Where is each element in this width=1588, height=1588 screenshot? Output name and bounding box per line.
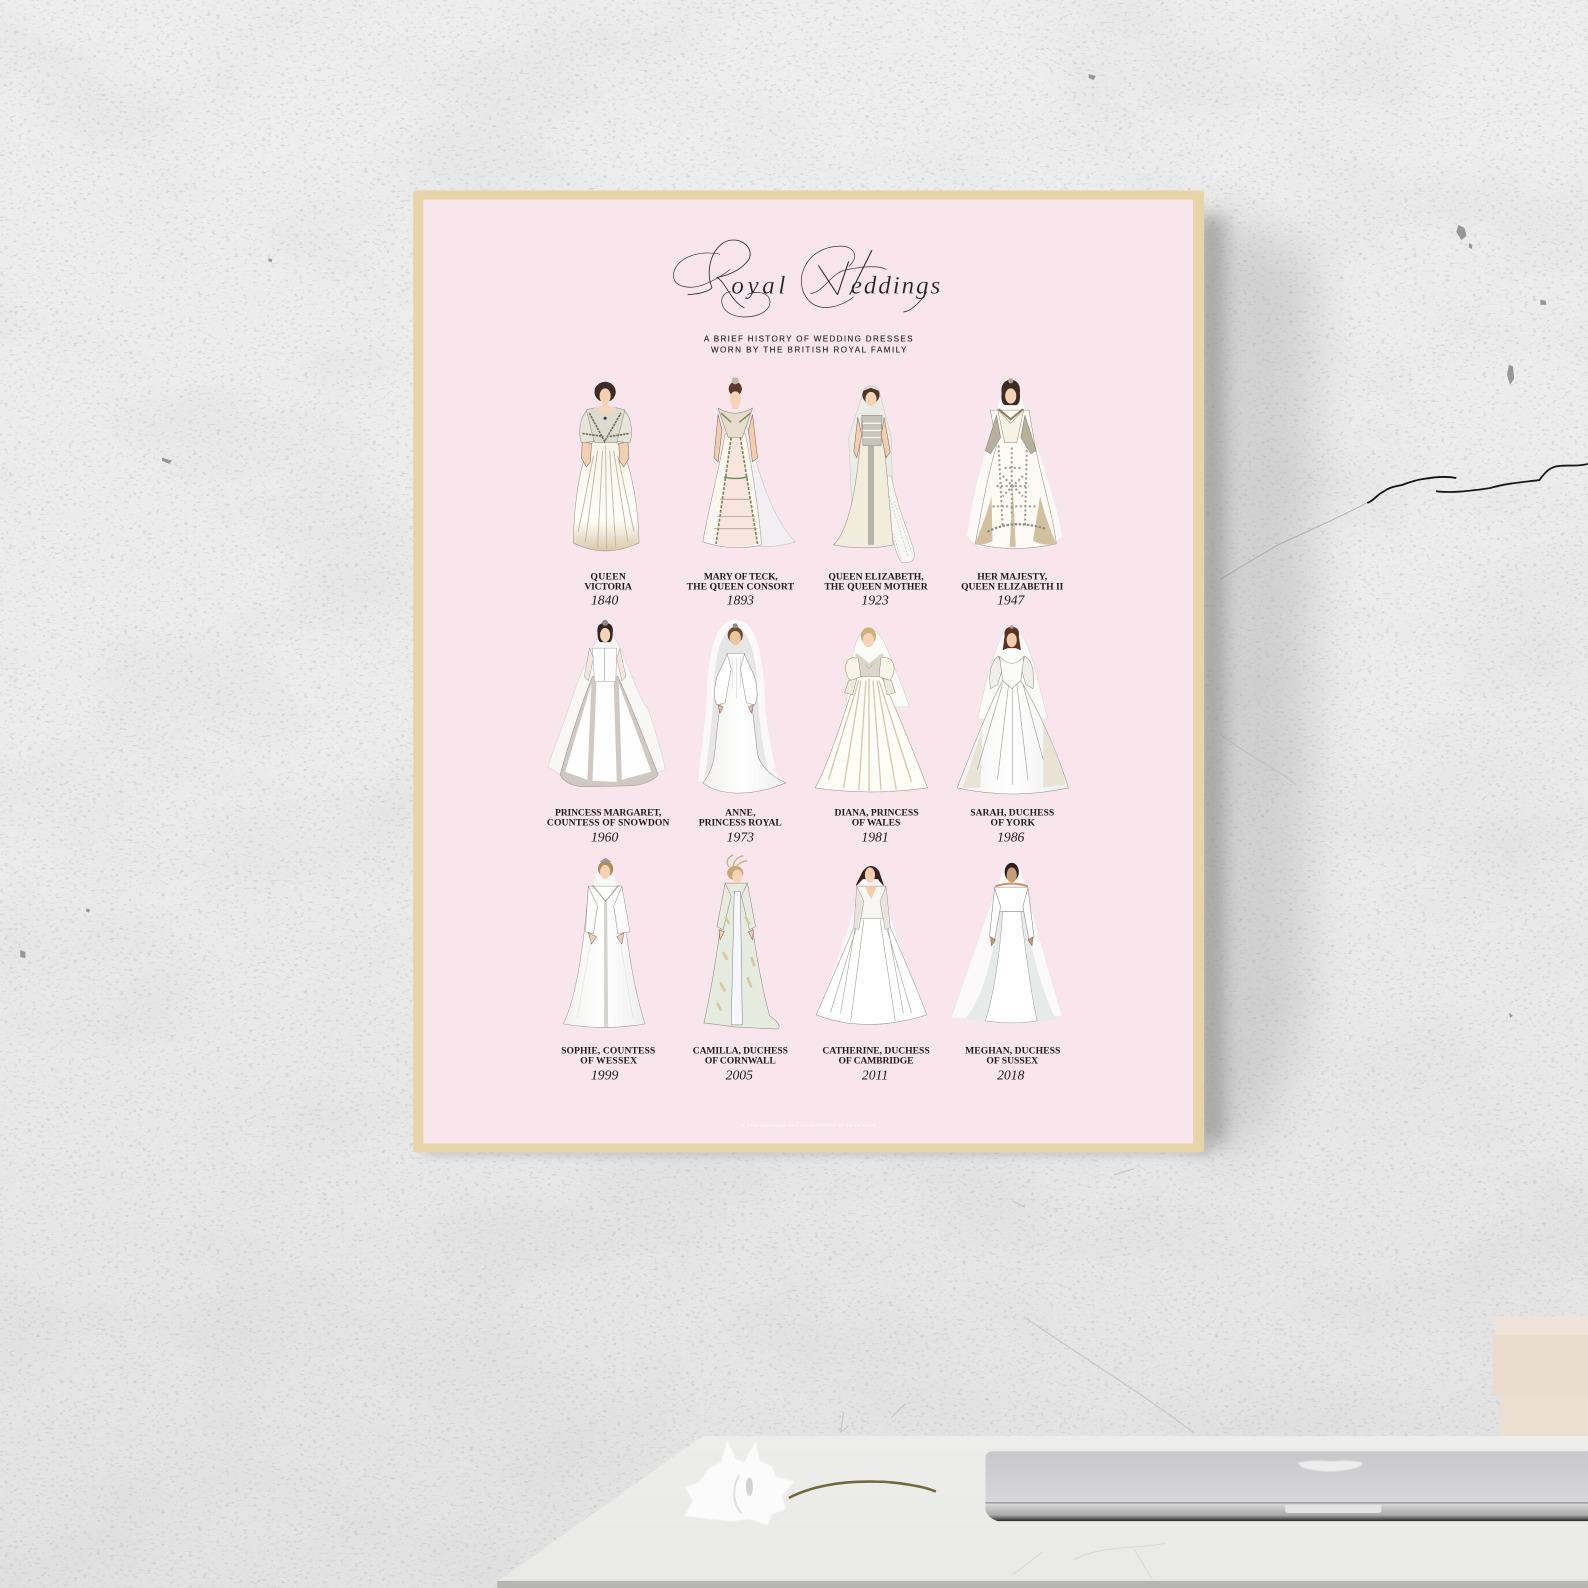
text: row two labels: [547, 807, 1054, 828]
text: row one labels: VICTORIA: [584, 581, 632, 592]
text: row two years: [591, 830, 1025, 845]
text: row one labels: QUEEN ELIZABETH,: [828, 571, 924, 582]
marble table: [497, 1436, 1588, 1588]
text: row two years: 1973: [727, 830, 754, 845]
text: row two labels: PRINCESS MARGARET,: [555, 807, 662, 818]
text: row two years: 1960: [591, 830, 618, 845]
text: row two labels: PRINCESS ROYAL: [699, 817, 782, 828]
text: row three years: 2005: [726, 1068, 753, 1083]
text: row two labels: SARAH, DUCHESS: [970, 807, 1054, 818]
text: row two labels: ANNE,: [725, 807, 756, 818]
title: eddings: [851, 272, 942, 300]
text: row one labels: QUEEN: [590, 571, 626, 582]
dress: Mary of Teck: [703, 377, 795, 548]
subtitle: A BRIEF HISTORY OF WEDDING DRESSES: [704, 334, 913, 343]
text: row three labels: OF SUSSEX: [986, 1055, 1038, 1066]
subtitle: WORN BY THE BRITISH ROYAL FAMILY: [711, 345, 907, 354]
subtitle: [704, 334, 913, 354]
text: row three labels: MEGHAN, DUCHESS: [965, 1045, 1060, 1056]
text: row two years: 1986: [997, 830, 1025, 845]
frame shadow: [425, 208, 1317, 1155]
dress: Catherine, Duchess of Cambridge: [816, 866, 927, 1024]
text: row one labels: THE QUEEN CONSORT: [687, 581, 795, 592]
text: row one labels: HER MAJESTY,: [977, 571, 1048, 582]
text: row three years: [591, 1068, 1025, 1083]
pink poster: [423, 200, 1193, 1143]
text: row three labels: CAMILLA, DUCHESS: [693, 1045, 788, 1056]
text: row three labels: SOPHIE, COUNTESS: [561, 1045, 655, 1056]
text: row one labels: [584, 571, 1064, 592]
text: row three years: 2011: [862, 1068, 888, 1083]
text: row two labels: DIANA, PRINCESS: [835, 807, 919, 818]
wooden frame: [413, 190, 1204, 1153]
dress: Princess Margaret: [548, 620, 665, 787]
title: R: [706, 253, 735, 305]
text: row three labels: OF CAMBRIDGE: [839, 1055, 914, 1066]
text: row two labels: COUNTESS OF SNOWDON: [547, 817, 669, 828]
dress: Queen Elizabeth II: [967, 378, 1062, 548]
text: row three labels: [561, 1045, 1060, 1066]
text: row one years: 1893: [727, 593, 754, 608]
text: row three years: 1999: [591, 1068, 618, 1083]
text: row three years: 2018: [997, 1068, 1025, 1083]
footer credit: © 2018 DESIGNED AND ILLUSTRATED BY LEAH ZHAO: [741, 1122, 876, 1128]
dress: Camilla, Duchess of Cornwall: [704, 855, 779, 1029]
text: row one labels: MARY OF TECK,: [704, 571, 778, 582]
text: row one years: 1947: [997, 593, 1026, 608]
text: row one labels: THE QUEEN MOTHER: [824, 581, 929, 592]
text: row three labels: OF CORNWALL: [705, 1055, 776, 1066]
stacked boxes: [1493, 1317, 1588, 1454]
dress: Diana, Princess of Wales: [815, 627, 928, 792]
text: row one years: 1840: [591, 593, 618, 608]
white flower: [685, 1440, 936, 1525]
text: row two years: 1981: [861, 830, 889, 845]
text: row two labels: OF YORK: [990, 817, 1036, 828]
dress: Queen Victoria: [573, 382, 639, 551]
text: row three labels: CATHERINE, DUCHESS: [822, 1045, 930, 1056]
laptop: [985, 1451, 1588, 1521]
dress: Sophie, Countess of Wessex: [563, 858, 645, 1027]
dress: Anne, Princess Royal: [699, 620, 786, 793]
text: row three labels: OF WESSEX: [580, 1055, 637, 1066]
title: [673, 240, 942, 317]
dress: Sarah, Duchess of York: [957, 625, 1068, 794]
dress: Queen Elizabeth, the Queen Mother: [833, 385, 914, 563]
title: oyal: [731, 272, 789, 300]
text: row one years: [591, 593, 1026, 608]
dress: Meghan, Duchess of Sussex: [951, 863, 1062, 1023]
text: row one labels: QUEEN ELIZABETH II: [961, 581, 1064, 592]
text: row one years: 1923: [861, 593, 889, 608]
text: row two labels: OF WALES: [852, 817, 900, 828]
